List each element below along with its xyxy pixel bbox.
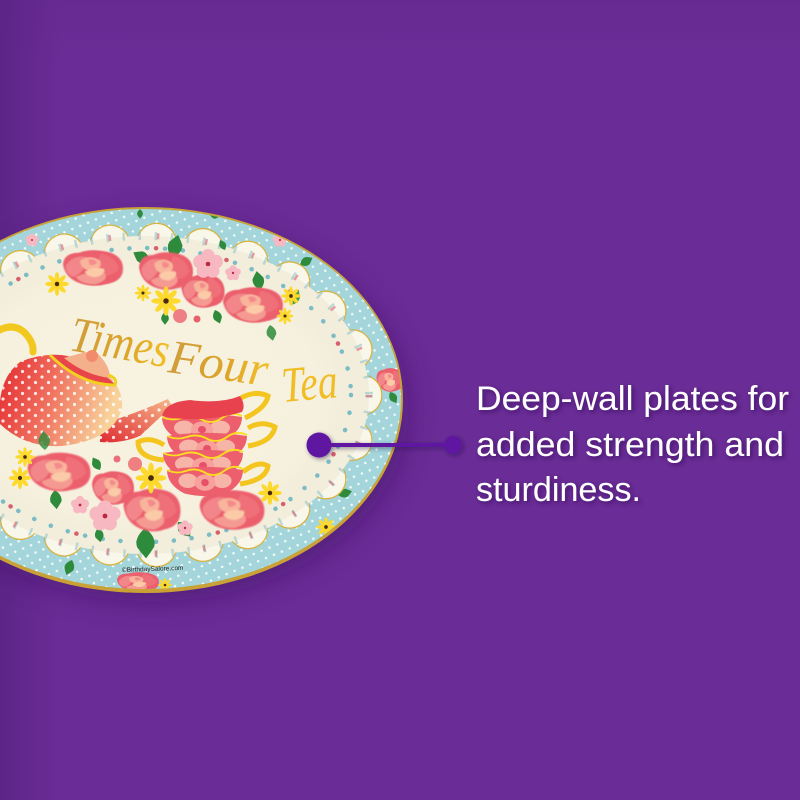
plate marker dot — [306, 432, 332, 458]
callout text: sturdiness. — [476, 471, 641, 509]
cup handles — [138, 393, 275, 484]
callout text: added strength and — [476, 426, 784, 464]
blue polka-dot rim — [0, 209, 401, 589]
callout text — [476, 380, 789, 509]
top cup interior — [162, 396, 244, 419]
plate shadow — [0, 219, 408, 601]
inner plate well — [0, 258, 340, 534]
top floral cluster — [45, 233, 303, 342]
spout — [100, 399, 172, 442]
rim florals — [26, 209, 404, 592]
gold plate edge — [0, 207, 403, 593]
teapot — [0, 327, 172, 446]
body — [0, 355, 122, 446]
lid — [50, 350, 116, 385]
callout connector — [306, 432, 462, 458]
copyright line: ©BirthdaySalore.com — [122, 564, 184, 574]
script title: Times Four Tea: Tea — [279, 352, 340, 413]
dotted ring — [0, 248, 351, 542]
callout text: Deep-wall plates for — [476, 380, 789, 418]
text-side marker dot — [444, 436, 462, 454]
script title: Times Four Tea: Times — [66, 306, 174, 378]
bottom floral cluster — [9, 430, 282, 559]
leader line — [319, 443, 453, 447]
script title: Times Four Tea — [66, 306, 340, 413]
lace scallop border — [0, 236, 369, 554]
stacked teacups — [138, 393, 275, 496]
script title: Times Four Tea: Four — [164, 330, 272, 397]
plate — [0, 207, 408, 601]
handle — [0, 327, 33, 352]
